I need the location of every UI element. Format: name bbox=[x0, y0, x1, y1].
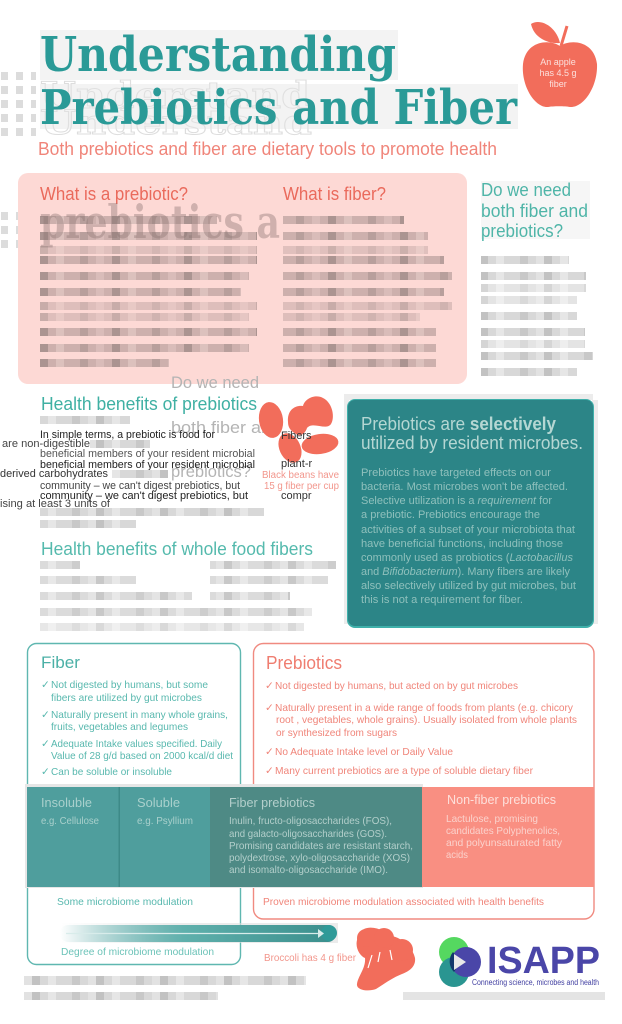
column: non-fiber prebiotics: candidates Polyphenolics, bbox=[446, 825, 560, 837]
fiber checklist: ✓ bbox=[41, 738, 50, 750]
column: fiber prebiotics: polydextrose, xylo-oligosaccharide (XOS) bbox=[229, 852, 410, 864]
label: proven microbiome modulation: Proven microbiome modulation associated with health benefits bbox=[263, 896, 544, 908]
column: fiber prebiotics bbox=[229, 795, 413, 876]
column: fiber prebiotics: Promising candidates are resistant starch, bbox=[229, 840, 413, 852]
icon: apple: An apple bbox=[540, 57, 576, 67]
fiber checklist: ✓ bbox=[41, 766, 50, 778]
column: fiber prebiotics: Fiber prebiotics bbox=[229, 795, 315, 810]
callout body: this is not a requirement for fiber. bbox=[361, 594, 523, 606]
footnote: credit bbox=[403, 992, 605, 1000]
panel: fiber bbox=[28, 644, 240, 964]
column: non-fiber prebiotics: Lactulose, promising bbox=[446, 813, 538, 825]
title bbox=[40, 27, 518, 136]
caption: broccoli: Broccoli has 4 g fiber bbox=[264, 952, 356, 964]
ghost text: stray do we need heading: Do we need bbox=[171, 373, 259, 392]
prebiotics checklist: No Adequate Intake level or Daily Value bbox=[275, 746, 453, 758]
ghost text: fiber column fragment bbox=[281, 430, 313, 502]
logo: ISAPP bbox=[439, 937, 600, 987]
arrow: degree of microbiome modulation bbox=[60, 923, 338, 943]
ghost text: stray title fragments: Understand bbox=[40, 103, 312, 143]
ghost text: stray do we need heading: both fiber and bbox=[171, 418, 281, 437]
subtitle: Both prebiotics and fiber are dietary tools to promote health bbox=[38, 139, 497, 159]
callout heading bbox=[361, 414, 583, 453]
title: Understanding bbox=[40, 27, 396, 83]
prebiotics checklist: ✓ bbox=[265, 746, 274, 758]
column: non-fiber prebiotics: Non-fiber prebiotics bbox=[447, 792, 556, 807]
ghost text: stray prebiotics fragment: prebiotics a bbox=[40, 195, 280, 249]
text block: do we need both answer bbox=[481, 256, 593, 376]
panel: prebiotics are selectively utilized bbox=[344, 394, 598, 628]
fiber checklist: fibers are utilized by gut microbes bbox=[51, 692, 202, 704]
icon: apple bbox=[523, 22, 597, 107]
text block: health benefits of prebiotics: are non-digestible bbox=[2, 438, 90, 450]
prebiotics checklist: or synthesized from sugars bbox=[276, 727, 397, 739]
column: non-fiber prebiotics bbox=[446, 792, 563, 861]
prebiotics checklist: Naturally present in a wide range of foods from plants (e.g. chicory bbox=[275, 702, 574, 714]
callout body: commonly used as probiotics (Lactobacillus bbox=[361, 552, 573, 564]
callout heading: Prebiotics are selectively bbox=[361, 414, 556, 434]
callout body: have beneficial functions, including those bbox=[361, 538, 563, 550]
fiber checklist: Not digested by humans, but some bbox=[51, 679, 208, 691]
column: soluble bbox=[137, 795, 193, 827]
column: fiber prebiotics: and isomalto-oligosaccharide (IMO). bbox=[229, 864, 388, 876]
label: some microbiome modulation: Some microbiome modulation bbox=[57, 896, 193, 908]
callout body: Selective utilization is a requirement for bbox=[361, 495, 552, 507]
callout body: Prebiotics have targeted effects on our bbox=[361, 467, 551, 479]
fiber checklist: Can be soluble or insoluble bbox=[51, 766, 172, 778]
callout body: a prebiotic. Prebiotics encourage the bbox=[361, 509, 540, 521]
heading: do we need both: both fiber and bbox=[481, 201, 588, 221]
text block: health benefits of prebiotics: In simple terms, a prebiotic is food for bbox=[40, 429, 215, 441]
ghost text: fiber column fragment: Fibers bbox=[281, 430, 312, 442]
column: insoluble: Insoluble bbox=[41, 795, 92, 810]
column: non-fiber prebiotics: acids bbox=[446, 849, 468, 861]
heading: health benefits of prebiotics: Health benefits of prebiotics bbox=[41, 394, 257, 414]
text block: health benefits of prebiotics: derived carbohydrates bbox=[0, 468, 108, 480]
column: fiber prebiotics: Inulin, fructo-oligosaccharides (FOS), bbox=[229, 815, 392, 827]
heading: what is fiber: What is fiber? bbox=[283, 184, 386, 204]
logo: ISAPP: ISAPP bbox=[487, 940, 600, 982]
prebiotics checklist: root , vegetables, whole grains). Usually isolated from whole plants bbox=[276, 714, 577, 726]
text block: health benefits of prebiotics: beneficial members of your resident microbial bbox=[40, 448, 255, 460]
heading: fiber: Fiber bbox=[41, 653, 80, 672]
fiber checklist: fruits, vegetables and legumes bbox=[51, 721, 188, 733]
text block: health benefits of prebiotics: ising at least 3 units of bbox=[0, 498, 111, 510]
fiber checklist: Value of 28 g/d based on 2000 kcal/d diet bbox=[51, 750, 233, 762]
text block: health benefits of prebiotics: beneficial members of your resident microbial bbox=[40, 459, 255, 471]
text block: health benefits of prebiotics: community – we can't digest prebiotics, but bbox=[40, 490, 248, 502]
fiber checklist: ✓ bbox=[41, 679, 50, 691]
ghost text: stray do we need heading bbox=[171, 373, 281, 481]
label: degree of microbiome modulation: Degree of microbiome modulation bbox=[61, 946, 214, 958]
icon: apple: fiber bbox=[549, 79, 567, 89]
icon: apple: has 4.5 g bbox=[539, 68, 577, 78]
callout body: and Bifidobacterium). Many fibers are likely bbox=[361, 566, 570, 578]
caption: black beans: 15 g fiber per cup bbox=[264, 481, 339, 492]
text block: whole food fibers bbox=[40, 561, 336, 631]
panel: prebiotics bbox=[254, 644, 594, 919]
callout body: activities of a subset of your microbiota that bbox=[361, 524, 575, 536]
column: insoluble bbox=[41, 795, 99, 827]
column: soluble: Soluble bbox=[137, 795, 180, 810]
callout body: bacteria. Most microbes won't be affected. bbox=[361, 481, 568, 493]
prebiotics checklist bbox=[265, 680, 577, 777]
column: fiber prebiotics: and galacto-oligosaccharides (GOS). bbox=[229, 828, 387, 840]
icon: broccoli bbox=[357, 928, 415, 990]
ghost text: fiber column fragment: plant-r bbox=[281, 458, 313, 470]
footnote: references bbox=[24, 976, 306, 1000]
fiber checklist: Adequate Intake values specified. Daily bbox=[51, 738, 223, 750]
ghost text: stray do we need heading: prebiotics? bbox=[171, 462, 251, 481]
ghost: stray pixel fragments at left edge bbox=[0, 70, 36, 250]
text block: health benefits of prebiotics bbox=[0, 416, 264, 528]
fiber checklist: ✓ bbox=[41, 709, 50, 721]
prebiotics checklist: ✓ bbox=[265, 702, 274, 714]
heading: do we need both: Do we need bbox=[481, 180, 571, 200]
icon: black beans bbox=[257, 396, 340, 467]
prebiotics checklist: Not digested by humans, but acted on by gut microbes bbox=[275, 680, 518, 692]
panel: what is a prebiotic and what is fiber bbox=[18, 173, 467, 384]
title: Prebiotics and Fiber bbox=[40, 80, 518, 136]
ghost text: fiber column fragment: compr bbox=[281, 490, 312, 502]
text block: prebiotic definition bbox=[40, 216, 257, 367]
prebiotics checklist: ✓ bbox=[265, 680, 274, 692]
caption: black beans: Black beans have bbox=[262, 470, 339, 481]
band: fiber types and prebiotic types bbox=[25, 784, 594, 888]
column: insoluble: e.g. Cellulose bbox=[41, 815, 99, 827]
ghost text: stray title fragments bbox=[40, 75, 312, 143]
ghost text: stray title fragments: Understand bbox=[40, 75, 310, 117]
column: non-fiber prebiotics: and polyunsaturated fatty bbox=[446, 837, 563, 849]
callout heading: utilized by resident microbes. bbox=[361, 433, 583, 453]
callout body: also selectively utilized by gut microbes, but bbox=[361, 580, 576, 592]
caption: black beans bbox=[262, 470, 339, 492]
heading: do we need both: prebiotics? bbox=[481, 221, 563, 241]
heading: prebiotics: Prebiotics bbox=[266, 653, 342, 673]
logo: ISAPP: Connecting science, microbes and health bbox=[472, 978, 599, 987]
callout body bbox=[361, 467, 576, 606]
heading: do we need both bbox=[481, 180, 590, 241]
prebiotics checklist: ✓ bbox=[265, 765, 274, 777]
text block: fiber definition bbox=[283, 216, 452, 367]
heading: health benefits of whole food fibers: Health benefits of whole food fibers bbox=[41, 539, 313, 559]
fiber checklist bbox=[41, 679, 233, 778]
heading: what is a prebiotic: What is a prebiotic? bbox=[40, 184, 188, 204]
prebiotics checklist: Many current prebiotics are a type of soluble dietary fiber bbox=[275, 765, 533, 777]
text block: health benefits of prebiotics: community – we can't digest prebiotics, but bbox=[40, 480, 240, 492]
column: soluble: e.g. Psyllium bbox=[137, 815, 193, 827]
fiber checklist: Naturally present in many whole grains, bbox=[51, 709, 228, 721]
